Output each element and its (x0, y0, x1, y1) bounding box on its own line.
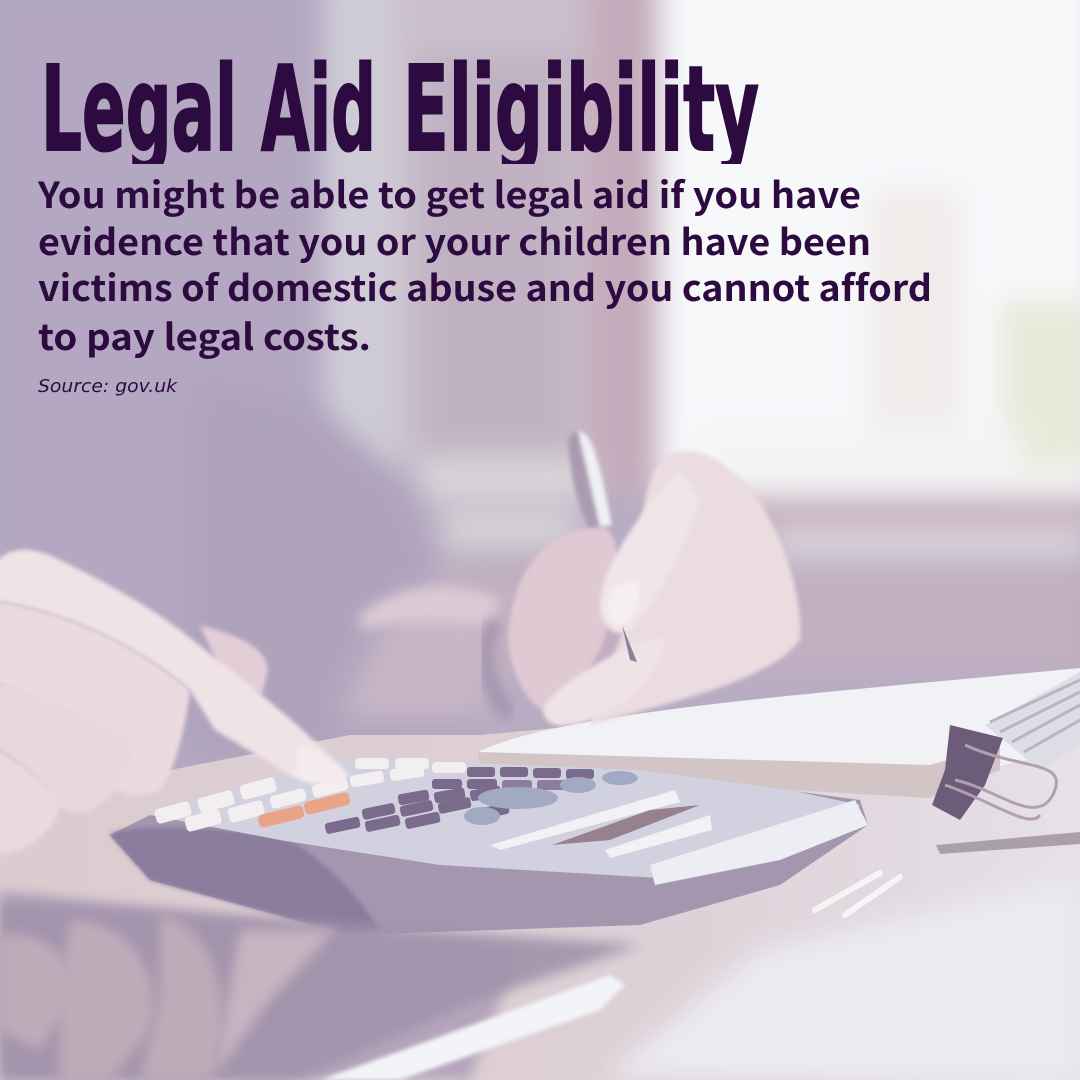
source note: Source: gov.uk (38, 376, 179, 397)
desk surface (0, 680, 1080, 1080)
title: Eligibility (403, 40, 759, 178)
title: Legal (41, 40, 237, 178)
dark keypad (324, 767, 594, 834)
intro paragraph: to pay legal costs. (38, 309, 371, 361)
intro paragraph: evidence that you or your children have been (38, 214, 871, 266)
intro paragraph: You might be able to get legal aid if you have (37, 167, 861, 219)
white function keys (154, 758, 466, 832)
calculator reflection and dark tablet (0, 900, 640, 1080)
calculator (110, 758, 868, 935)
pointing hand (0, 550, 347, 855)
orange keys (257, 805, 305, 828)
writing hand with pen (487, 432, 800, 726)
intro paragraph (37, 167, 932, 361)
title: Aid (261, 40, 376, 178)
intro paragraph: victims of domestic abuse and you cannot afford (38, 260, 932, 312)
title (46, 60, 759, 164)
notebook (478, 668, 1080, 854)
paper clips (815, 873, 900, 915)
